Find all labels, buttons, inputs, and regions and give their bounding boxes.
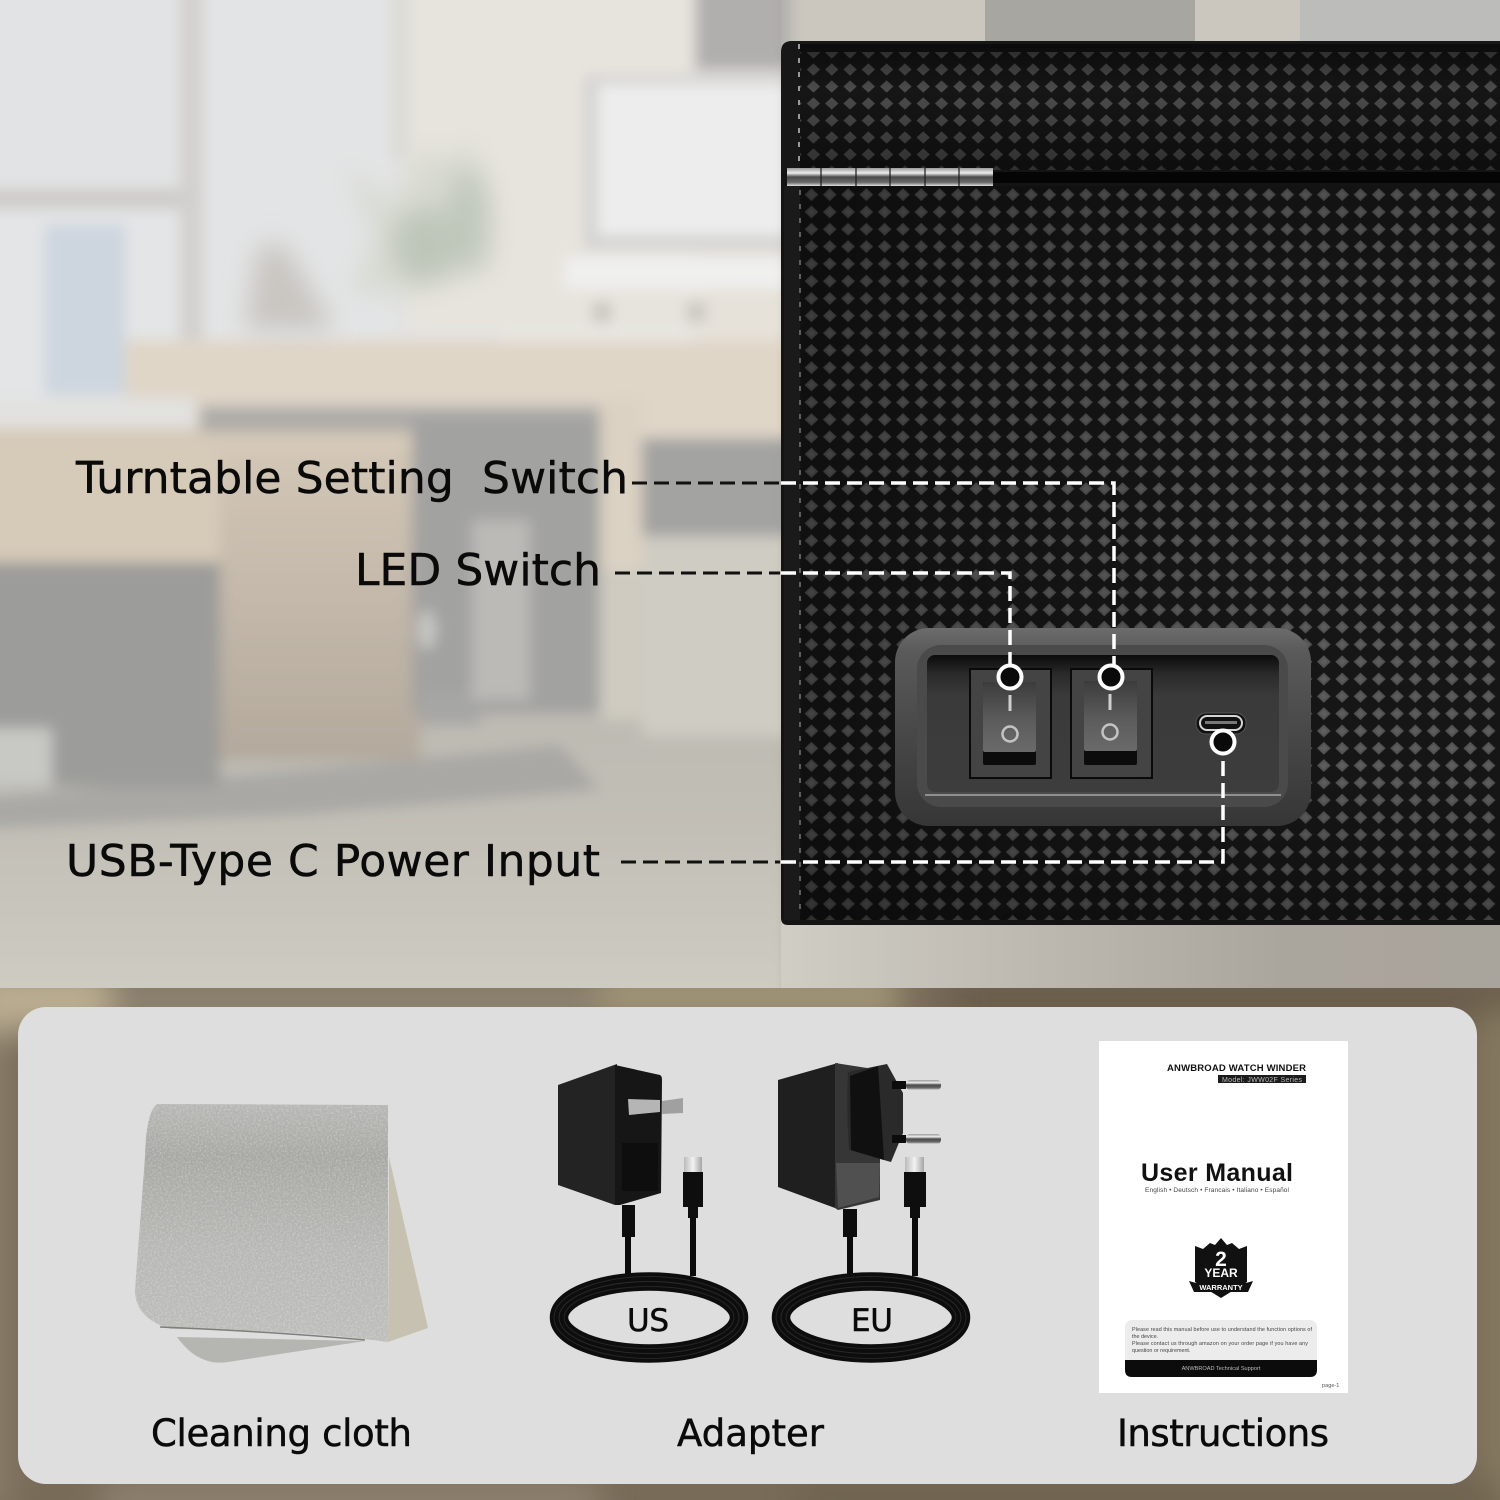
panel: accessories	[18, 1007, 1477, 1484]
USB-C port	[1196, 713, 1246, 734]
manual support note: the device.	[1132, 1334, 1158, 1340]
desk top	[125, 340, 790, 438]
manual languages: English • Deutsch • Francais • Italiano • Español	[1145, 1187, 1290, 1194]
backdrop below box	[781, 920, 1500, 988]
blurred plants	[245, 140, 495, 330]
callout: LED switch	[355, 545, 1022, 688]
turntable rocker switch	[1071, 669, 1152, 778]
grey cabinet	[412, 418, 602, 713]
callout: USB-Type C power input	[66, 730, 1234, 887]
icon: EU adapter	[776, 1063, 966, 1358]
manual model bar: Model: JWW02F Series	[1222, 1077, 1302, 1084]
manual support note: Please read this manual before use to understand the function options of	[1132, 1327, 1312, 1333]
icon: cleaning cloth	[135, 1104, 428, 1363]
monitor	[585, 76, 790, 248]
icon: 2 year warranty shield	[1189, 1238, 1253, 1298]
LED rocker switch	[970, 669, 1051, 778]
instruction manual	[1099, 1041, 1348, 1393]
backdrop above box	[781, 0, 1500, 60]
manual title: User Manual	[1141, 1159, 1293, 1187]
under desk	[0, 428, 420, 563]
callout: USB-Type C power input: USB-Type C Power Input	[66, 836, 600, 887]
manual brand heading: ANWBROAD WATCH WINDER	[1167, 1063, 1306, 1074]
hinge	[787, 168, 993, 186]
icon: 2 year warranty shield: 2	[1215, 1248, 1227, 1271]
icon: 2 year warranty shield: YEAR	[1204, 1266, 1238, 1280]
callout: LED switch: LED Switch	[355, 545, 601, 596]
label: instructions: Instructions	[1117, 1412, 1329, 1455]
left cabinet	[0, 562, 220, 787]
watch winder box	[781, 41, 1500, 925]
label: EU: EU	[851, 1303, 893, 1339]
label: adapter: Adapter	[677, 1412, 825, 1455]
box front	[781, 170, 1500, 925]
callout: turntable setting switch	[75, 453, 1122, 688]
label: cleaning cloth: Cleaning cloth	[151, 1412, 412, 1455]
manual support note	[1125, 1320, 1317, 1377]
manual support note: ANWBROAD Technical Support	[1182, 1366, 1261, 1372]
floor	[0, 705, 782, 988]
manual support note: question or requirement.	[1132, 1348, 1190, 1354]
manual page number: page-1	[1322, 1383, 1339, 1389]
label: US: US	[627, 1303, 669, 1339]
blurred room background photo	[0, 0, 790, 1040]
floor strip behind accessory panel	[0, 970, 1500, 1500]
icon: US adapter	[554, 1064, 744, 1358]
callout: turntable setting switch: Turntable Setting Switch	[75, 453, 628, 504]
window panes	[0, 0, 180, 188]
manual support note: Please contact us through amazon on your order page if you have any	[1132, 1341, 1308, 1347]
icon: 2 year warranty shield: WARRANTY	[1199, 1283, 1243, 1292]
box lid	[781, 41, 1500, 178]
switch panel	[895, 628, 1311, 826]
